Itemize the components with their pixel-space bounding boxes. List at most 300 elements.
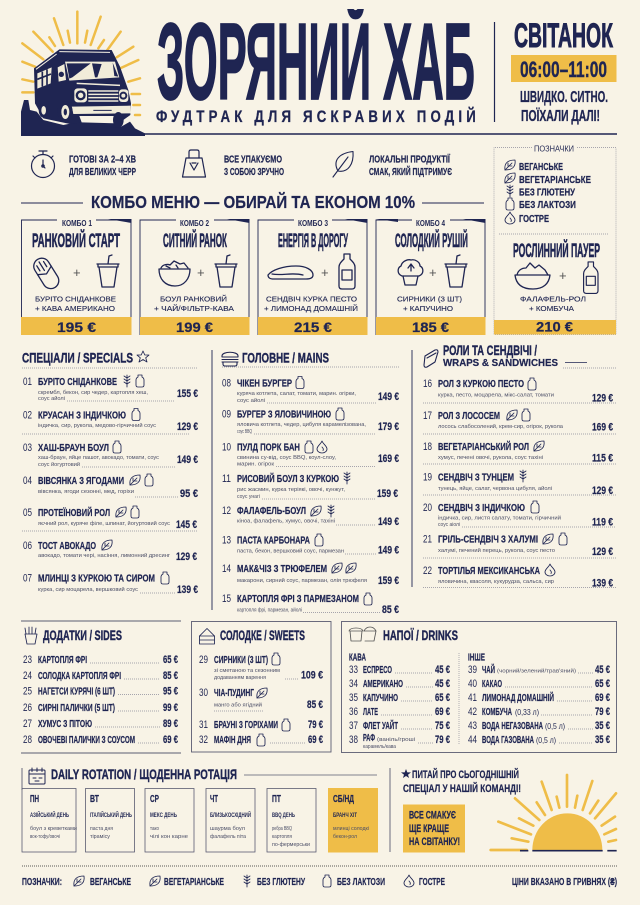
legend vegan bbox=[505, 160, 563, 173]
item 20: 20 bbox=[423, 502, 432, 514]
item 20: соус аіолі bbox=[438, 522, 460, 528]
heading: DAILY ROTATION / ЩОДЕННА РОТАЦІЯ bbox=[51, 766, 237, 782]
frame bbox=[22, 220, 131, 335]
item 10: марин. огірок bbox=[237, 462, 275, 468]
item 27: ХУМУС З ПІТОЮ bbox=[38, 718, 92, 730]
item 05 bbox=[22, 506, 198, 531]
panel: sweets bbox=[192, 622, 331, 752]
item 04: 95 € bbox=[180, 488, 198, 500]
item 40: 65 € bbox=[595, 678, 610, 690]
panel: legend and plant combo bbox=[494, 144, 616, 334]
item 18 bbox=[423, 440, 616, 464]
icon: cup bbox=[215, 255, 237, 287]
label: КОМБО 4 bbox=[416, 219, 445, 228]
icon: muffin bbox=[398, 260, 423, 285]
item 05: 145 € bbox=[176, 519, 197, 531]
icon: bag bbox=[182, 150, 206, 177]
item 39: ЧАЙ bbox=[482, 663, 495, 676]
item 03 bbox=[23, 441, 198, 468]
item 19: 19 bbox=[423, 472, 432, 484]
combo text: + ЛИМОНАД ДОМАШНІЙ bbox=[264, 304, 358, 313]
item 01: скрембл, бекон, сир чедер, картопля хеш, bbox=[38, 390, 148, 396]
item 38: 79 € bbox=[435, 734, 450, 746]
price bar bbox=[258, 317, 368, 335]
tagline 2: ПОЇХАЛИ ДАЛІ! bbox=[521, 107, 600, 125]
item 32: МАФІН ДНЯ bbox=[214, 734, 251, 746]
vegan: ВЕГАНСЬКЕ bbox=[90, 876, 131, 888]
item 04: ВІВСЯНКА З ЯГОДАМИ bbox=[38, 475, 124, 487]
price: 185 € bbox=[412, 319, 449, 335]
footer legend bbox=[22, 866, 617, 888]
headlights bbox=[74, 88, 87, 102]
item 37: 37 bbox=[349, 720, 358, 732]
item 21: ГРІЛЬ-СЕНДВІЧ З ХАЛУМІ bbox=[438, 534, 538, 546]
item 44 bbox=[468, 734, 610, 746]
frame bbox=[192, 622, 331, 752]
item 11: рис жасмин, курка теріякі, овочі, кунжут, bbox=[237, 487, 345, 493]
item 09: 09 bbox=[222, 408, 231, 420]
item 14: МАК&ЧІЗ З ТРЮФЕЛЕМ bbox=[237, 563, 327, 575]
item 07: курка, сир моцарела, вершковий соус bbox=[38, 586, 138, 593]
item 29 bbox=[199, 653, 323, 682]
vegetarian bbox=[150, 876, 224, 888]
plant combo text: + КОМБУЧА bbox=[529, 304, 575, 313]
item 32 bbox=[199, 734, 323, 746]
item 20: СЕНДВІЧ З ІНДИЧКОЮ bbox=[438, 502, 525, 514]
heading: НАПОЇ / DRINKS bbox=[383, 627, 458, 643]
legend vegetarian bbox=[505, 173, 591, 186]
item 25: 95 € bbox=[163, 686, 178, 698]
panel: daily rotation bbox=[22, 766, 378, 852]
item 30: 30 bbox=[199, 687, 208, 699]
other subheading: ІНШЕ bbox=[468, 652, 485, 664]
item 01 bbox=[23, 375, 198, 402]
item 30: манго або ягідний bbox=[214, 702, 262, 708]
panel: combo 4 bbox=[376, 219, 486, 335]
gluten free: БЕЗ ГЛЮТЕНУ bbox=[257, 876, 305, 888]
item 13: 13 bbox=[222, 534, 231, 546]
item 08: куряча котлета, салат, томати, марин. огірки, bbox=[237, 391, 356, 397]
item 36: 69 € bbox=[435, 706, 450, 718]
legend vegetarian: ВЕГЕТАРІАНСЬКЕ bbox=[519, 174, 591, 186]
item 44: 44 bbox=[468, 734, 477, 746]
icon: bottle bbox=[584, 262, 598, 293]
feature: ready fast: ГОТОВІ ЗА 2–4 ХВ bbox=[69, 154, 136, 166]
legend gluten free bbox=[507, 185, 575, 198]
item 22: 139 € bbox=[592, 578, 613, 590]
price bar bbox=[140, 317, 250, 335]
truck bbox=[21, 49, 145, 136]
item 11: соус унагі bbox=[237, 494, 260, 500]
item 43: 43 bbox=[468, 720, 477, 732]
feature row bbox=[32, 150, 452, 178]
combo text: БУРІТО СНІДАНКОВЕ bbox=[35, 294, 116, 304]
item 14: 159 € bbox=[378, 575, 399, 587]
icon: bottle bbox=[339, 254, 355, 289]
item 09: 179 € bbox=[378, 421, 399, 433]
item 41: 41 bbox=[468, 692, 477, 704]
card: monday: ПН bbox=[30, 793, 39, 805]
legend spicy bbox=[505, 212, 549, 225]
card: wednesday: тако bbox=[150, 826, 159, 832]
legend lactose free bbox=[506, 198, 576, 211]
item 11: 11 bbox=[222, 473, 231, 485]
item 12: ФАЛАФЕЛЬ-БОУЛ bbox=[237, 505, 306, 517]
item 31: 79 € bbox=[308, 719, 323, 731]
callout text bbox=[403, 768, 521, 795]
card: friday: картопля bbox=[272, 834, 292, 840]
item 04: 04 bbox=[23, 475, 32, 487]
item 06: 06 bbox=[23, 540, 32, 552]
item 16: 16 bbox=[423, 378, 432, 390]
plus: + bbox=[559, 268, 567, 283]
item 25: НАГЕТСИ КУРЯЧІ (6 ШТ) bbox=[38, 686, 115, 698]
item 42: КОМБУЧА bbox=[482, 706, 512, 718]
item 20 bbox=[423, 501, 616, 528]
combo title: РАНКОВИЙ СТАРТ bbox=[32, 230, 120, 252]
item 38: карамель/кава bbox=[363, 744, 397, 750]
item 17 bbox=[423, 409, 616, 434]
heading: СПЕЦІАЛИ / SPECIALS bbox=[22, 350, 133, 366]
combo rule right bbox=[422, 202, 484, 204]
sun rays bbox=[22, 12, 140, 115]
ground bbox=[21, 100, 145, 136]
callout text: ПИТАЙ ПРО СЬОГОДНІШНІЙ bbox=[412, 768, 519, 781]
item 41: ЛИМОНАД ДОМАШНІЙ bbox=[482, 691, 554, 704]
item 22: яловичина, квасоля, кукурудза, сальса, сир bbox=[438, 579, 554, 585]
item 39: (чорний/зелений/трав'яний) bbox=[497, 668, 576, 674]
price: 195 € bbox=[57, 319, 96, 335]
item 03: хаш-браун, яйце пашот, авокадо, томати, соус bbox=[38, 454, 159, 461]
label: КОМБО 1 bbox=[62, 219, 92, 228]
card: monday: вок-тофу/овочі bbox=[30, 834, 60, 840]
roof highlight bbox=[36, 52, 110, 69]
item 44: ВОДА ГАЗОВАНА bbox=[482, 734, 534, 746]
side window bbox=[37, 67, 52, 89]
item 14 bbox=[222, 563, 399, 587]
icon: star bbox=[137, 351, 149, 362]
item 02: 129 € bbox=[177, 421, 198, 433]
item 11: РИСОВИЙ БОУЛ З КУРКОЮ bbox=[237, 472, 339, 485]
panel: combo 2 bbox=[140, 219, 250, 335]
item 34: АМЕРИКАНО bbox=[363, 678, 403, 690]
item 27: 89 € bbox=[163, 718, 178, 730]
item 38: 38 bbox=[349, 734, 358, 746]
plus: + bbox=[73, 265, 81, 280]
heading bbox=[443, 343, 558, 369]
item 42: 79 € bbox=[595, 706, 610, 718]
feature: local: ЛОКАЛЬНІ ПРОДУКТІЇ bbox=[369, 152, 451, 166]
yellow note: НА СВІТАНКУ! bbox=[409, 836, 460, 848]
divider bbox=[499, 233, 609, 235]
combo text: + КАПУЧИНО bbox=[403, 304, 453, 313]
panel: drinks bbox=[342, 622, 616, 752]
wheels bbox=[57, 101, 73, 122]
item 08: ЧІКЕН БУРГЕР bbox=[237, 378, 292, 390]
item 11 bbox=[222, 472, 398, 500]
yellow note: ЩЕ КРАЩЕ bbox=[409, 823, 449, 835]
item 19 bbox=[423, 470, 616, 497]
combo text: + КАВА АМЕРИКАНО bbox=[35, 304, 115, 313]
item 37: ФЛЕТ УАЙТ bbox=[363, 719, 398, 732]
card: thursday bbox=[206, 788, 255, 852]
item 42 bbox=[468, 706, 610, 718]
combo text: + ЧАЙ/ФІЛЬТР-КАВА bbox=[154, 304, 235, 313]
item 10: свинина су-від, соус BBQ, коул-слоу, bbox=[237, 455, 336, 461]
panel: specials bbox=[22, 350, 198, 596]
item 05: ПРОТЕЇНОВИЙ РОЛ bbox=[38, 506, 110, 519]
feature: packaging bbox=[224, 154, 284, 178]
item 39: 39 bbox=[468, 664, 477, 676]
item 08: соус айолі bbox=[237, 397, 265, 404]
price bar bbox=[376, 317, 486, 335]
item 08: 08 bbox=[222, 378, 231, 390]
item 17: 17 bbox=[423, 410, 432, 422]
icon: burger bbox=[222, 352, 238, 366]
item 06 bbox=[23, 540, 197, 563]
item 18: ВЕГЕТАРІАНСЬКИЙ РОЛ bbox=[438, 440, 529, 453]
card: friday: ПТ bbox=[272, 793, 281, 805]
combo text: БОУЛ РАНКОВИЙ bbox=[160, 294, 227, 304]
frame bbox=[140, 220, 249, 335]
item 34: 45 € bbox=[435, 678, 450, 690]
item 43: ВОДА НЕГАЗОВАНА bbox=[482, 720, 543, 732]
item 29: зі сметаною та сезонним bbox=[214, 668, 280, 674]
item 21: 129 € bbox=[592, 546, 613, 558]
item 09: яловича котлета, чедер, цибуля карамелізована, bbox=[237, 422, 366, 428]
item 39: 45 € bbox=[595, 664, 610, 676]
item 30: 85 € bbox=[307, 699, 323, 711]
item 01: соус айолі bbox=[38, 395, 65, 402]
yellow note bbox=[403, 804, 465, 852]
card: friday bbox=[267, 788, 316, 852]
icon: cups bbox=[349, 627, 376, 641]
item 26: СИРНІ ПАЛИЧКИ (5 ШТ) bbox=[38, 702, 115, 714]
card: friday: ребра BBQ bbox=[272, 826, 292, 832]
item 14: 14 bbox=[222, 563, 231, 575]
feature: ready fast bbox=[69, 154, 136, 178]
subtitle: ФУДТРАК ДЛЯ ЯСКРАВИХ ПОДІЙ bbox=[156, 106, 476, 126]
item 04 bbox=[23, 474, 198, 500]
item 24: СОЛОДКА КАРТОПЛЯ ФРІ bbox=[38, 670, 121, 682]
item 17: РОЛ З ЛОСОСЕМ bbox=[438, 410, 500, 422]
item 08 bbox=[222, 376, 399, 404]
item 37 bbox=[349, 719, 450, 732]
combo section bbox=[21, 191, 486, 335]
heading: РОЛИ ТА СЕНДВІЧІ / bbox=[443, 343, 537, 358]
coffee subheading: КАВА bbox=[349, 652, 366, 664]
card: weekend: БРАНЧ ХІТ bbox=[333, 812, 357, 819]
item 30: ЧІА-ПУДИНГ bbox=[214, 687, 254, 699]
item 27: 27 bbox=[23, 718, 32, 730]
item 39 bbox=[468, 663, 610, 676]
combo text bbox=[397, 294, 462, 313]
panel: combo 4: СОЛОДКИЙ РУШІЙ bbox=[395, 230, 468, 252]
item 27 bbox=[23, 718, 178, 730]
item 19: тунець, яйце, салат, червона цибуля, айолі bbox=[438, 485, 552, 492]
item 03: соус йогуртовий bbox=[38, 461, 80, 468]
card: friday: по-фермерськи bbox=[272, 842, 310, 848]
item 21 bbox=[423, 533, 616, 558]
legend heading: ПОЗНАЧКИ bbox=[534, 144, 574, 154]
item 22 bbox=[423, 564, 616, 590]
item 07: 139 € bbox=[177, 584, 198, 596]
frame bbox=[342, 622, 616, 752]
top rule bbox=[21, 620, 181, 622]
label: КОМБО 2 bbox=[180, 219, 209, 228]
card: weekend: бекон-рол bbox=[333, 834, 357, 840]
spicy bbox=[404, 875, 445, 888]
door window bbox=[58, 64, 66, 82]
item 23: 23 bbox=[23, 654, 32, 666]
card: wednesday: МЕКС ДЕНЬ bbox=[150, 812, 177, 819]
item 18: 115 € bbox=[592, 452, 613, 464]
plant combo text: ФАЛАФЕЛЬ-РОЛ bbox=[520, 294, 586, 304]
card: weekend: СБ/НД bbox=[333, 793, 354, 805]
item 21: халумі, печений перець, рукола, соус песто bbox=[438, 547, 555, 554]
item 03: ХАШ-БРАУН БОУЛ bbox=[38, 442, 109, 454]
item 35: 65 € bbox=[435, 692, 450, 704]
plus: + bbox=[429, 265, 437, 280]
truck body bbox=[34, 49, 131, 128]
item 16: РОЛ З КУРКОЮ ПЕСТО bbox=[438, 378, 524, 390]
bumper bbox=[72, 106, 131, 114]
item 38: (ваніль/гроші bbox=[377, 737, 415, 743]
plus: + bbox=[321, 265, 329, 280]
card: thursday: шаурма боул bbox=[210, 826, 245, 832]
header rule bbox=[21, 133, 617, 135]
card: tuesday: ІТАЛІЙСЬКИЙ ДЕНЬ bbox=[90, 810, 132, 819]
gluten free bbox=[244, 875, 305, 888]
item 36: ЛАТЕ bbox=[363, 706, 378, 718]
vegetarian: ВЕГЕТАРІАНСЬКЕ bbox=[164, 876, 224, 888]
item 06: 129 € bbox=[176, 551, 197, 563]
plus: + bbox=[197, 265, 205, 280]
item 33: 45 € bbox=[435, 664, 450, 676]
legend lactose free: БЕЗ ЛАКТОЗИ bbox=[519, 199, 576, 211]
item 28: ОВОЧЕВІ ПАЛИЧКИ З СОУСОМ bbox=[38, 734, 135, 746]
icon: cake bbox=[200, 628, 214, 644]
item 33: 33 bbox=[349, 664, 358, 676]
label: КОМБО 3 bbox=[298, 219, 328, 228]
frame bbox=[376, 220, 485, 335]
item 05: яєчний рол, куряче філе, шпинат, йогуртовий соус bbox=[38, 520, 170, 527]
item 14: макарони, сирний соус, пармезан, олія трюфеля bbox=[237, 577, 367, 584]
item 09: соус BBQ bbox=[237, 429, 252, 435]
sun rays bbox=[491, 775, 616, 850]
item 07 bbox=[23, 572, 198, 596]
item 38: РАФ bbox=[363, 732, 375, 744]
item 15: картопля фрі, пармезан, айолі bbox=[237, 606, 302, 614]
legend gluten free: БЕЗ ГЛЮТЕНУ bbox=[519, 186, 575, 198]
star bbox=[401, 769, 411, 778]
combo rule left bbox=[21, 202, 83, 204]
feature: local bbox=[369, 152, 452, 178]
feature: local: СМАК, ЯКИЙ ПІДТРИМУЄ bbox=[369, 165, 452, 178]
item 32: 69 € bbox=[308, 734, 323, 746]
item 05: 05 bbox=[23, 507, 32, 519]
combo text: СИРНИКИ (3 ШТ) bbox=[397, 294, 462, 304]
item 30 bbox=[199, 687, 323, 711]
item 06: авокадо, томати чері, насіння, лимонний дресинг bbox=[38, 552, 170, 559]
item 17: лосось слабосолений, крем-сир, огірок, рукола bbox=[438, 423, 564, 430]
card: thursday: БЛИЗЬКОСХІДНИЙ bbox=[210, 810, 251, 819]
windshield bbox=[65, 62, 119, 81]
item 02 bbox=[22, 408, 198, 434]
card: tuesday: ВТ bbox=[90, 793, 99, 805]
icon: stopwatch bbox=[32, 151, 54, 178]
spicy: ГОСТРЕ bbox=[419, 876, 445, 888]
item 20: індичка, сир, листя салату, томати, гірчичний bbox=[438, 514, 561, 522]
panel: wraps bbox=[423, 343, 616, 590]
item 35 bbox=[349, 692, 450, 704]
item 29: додаванням варення bbox=[214, 675, 266, 681]
item 28: 28 bbox=[23, 734, 32, 746]
item 13: паста, бекон, вершковий соус, пармезан bbox=[237, 548, 344, 554]
hours badge bbox=[511, 55, 616, 82]
card: thursday: фалафель піта bbox=[210, 834, 247, 840]
item 43: 35 € bbox=[595, 720, 610, 732]
icon: bowl bbox=[159, 261, 190, 286]
item 25: 25 bbox=[23, 686, 32, 698]
item 01: БУРІТО СНІДАНКОВЕ bbox=[38, 376, 117, 388]
item 09 bbox=[222, 408, 399, 435]
grille bbox=[77, 83, 120, 101]
item 12: 12 bbox=[222, 505, 231, 517]
divider bbox=[458, 653, 460, 744]
icon: calendar bbox=[29, 768, 45, 784]
vegan bbox=[74, 876, 131, 888]
item 40: КАКАО bbox=[482, 678, 502, 690]
item 40: 40 bbox=[468, 678, 477, 690]
price bar bbox=[21, 317, 132, 335]
combo text bbox=[154, 294, 235, 313]
road patch bbox=[79, 116, 118, 123]
bottom rule bbox=[21, 752, 181, 754]
logo: food truck with sun rays bbox=[21, 12, 145, 136]
card: monday: АЗІЙСЬКИЙ ДЕНЬ bbox=[30, 810, 69, 819]
item 19: СЕНДВІЧ З ТУНЦЕМ bbox=[438, 472, 514, 484]
item 36 bbox=[349, 706, 450, 718]
item 29: 29 bbox=[199, 654, 208, 666]
heading: ДОДАТКИ / SIDES bbox=[43, 627, 122, 643]
feature: packaging: З СОБОЮ ЗРУЧНО bbox=[224, 166, 284, 178]
item 33: ЕСПРЕСО bbox=[363, 664, 392, 676]
panel: combo 1 bbox=[21, 219, 132, 335]
card: wednesday: чілі кон карне bbox=[150, 834, 188, 840]
item 41: 69 € bbox=[595, 692, 610, 704]
legend vegan: ВЕГАНСЬКЕ bbox=[519, 161, 563, 173]
item 22: 22 bbox=[423, 565, 432, 577]
card: tuesday bbox=[86, 788, 134, 852]
item 13: 149 € bbox=[378, 544, 399, 556]
item 36: 36 bbox=[349, 706, 358, 718]
item 10 bbox=[222, 441, 399, 468]
sun illustration bbox=[491, 775, 617, 851]
item 26: 99 € bbox=[163, 702, 178, 714]
item 34: 34 bbox=[349, 678, 358, 690]
card: wednesday bbox=[145, 788, 194, 852]
item 16 bbox=[423, 378, 616, 404]
item 15 bbox=[222, 593, 399, 616]
item 12 bbox=[222, 505, 399, 528]
panel: combo 2: СИТНИЙ РАНОК bbox=[163, 230, 227, 252]
card: monday: боул з креветками bbox=[30, 826, 77, 832]
item 01: 155 € bbox=[177, 388, 198, 400]
card: friday: BBQ ДЕНЬ bbox=[272, 812, 295, 819]
item 10: 169 € bbox=[378, 453, 399, 465]
dashed frame bbox=[494, 148, 616, 334]
